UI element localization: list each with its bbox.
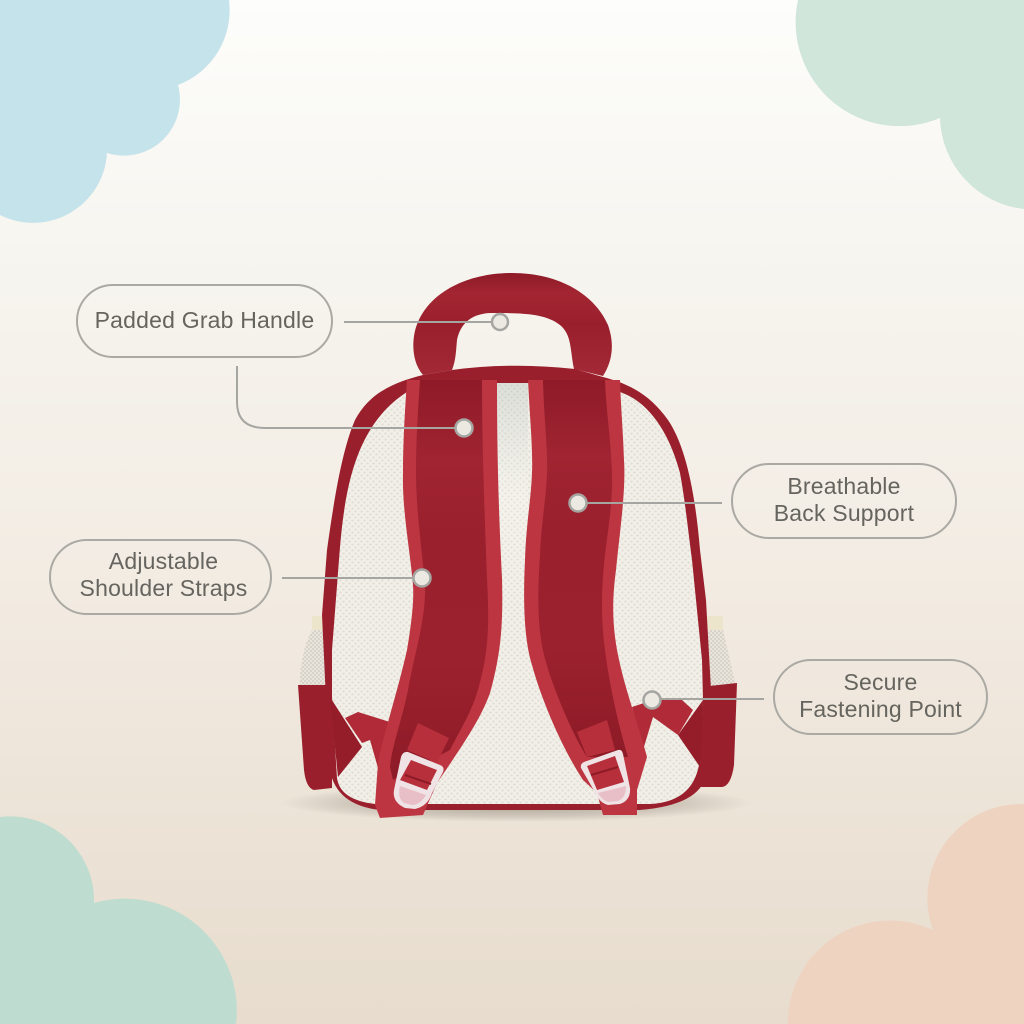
label: adjustable shoulder straps: [49, 539, 272, 615]
grab handle: [413, 273, 612, 376]
left webbing strap: [330, 697, 390, 777]
left buckle: [394, 723, 449, 809]
decoration: green cloud top right: [796, 0, 1024, 209]
label: secure fastening point: [773, 659, 988, 735]
label: breathable back support: Back Support: [774, 500, 914, 526]
ground shadow: [281, 784, 751, 822]
mesh back panel: [332, 383, 703, 804]
side pockets: [298, 616, 737, 790]
label: adjustable shoulder straps: Shoulder Straps: [80, 575, 247, 601]
backpack illustration: [281, 273, 751, 822]
back panel body: [322, 366, 711, 810]
right shoulder strap: [524, 380, 647, 815]
label: breathable back support: [731, 463, 957, 539]
mesh centre channel shading: [497, 383, 528, 763]
right webbing strap: [632, 700, 703, 767]
label: secure fastening point: Fastening Point: [799, 696, 962, 722]
label: padded grab handle: Padded Grab Handle: [95, 306, 314, 332]
decoration: blue cloud top left: [0, 0, 230, 223]
label: breathable back support: Breathable: [787, 472, 901, 498]
label: padded grab handle: [76, 284, 333, 358]
right buckle: [577, 720, 630, 805]
decoration: peach cloud bottom right: [788, 804, 1024, 1024]
marker dots: [414, 314, 660, 708]
label: adjustable shoulder straps: Adjustable: [109, 548, 218, 574]
left shoulder strap: [375, 380, 502, 818]
decoration: green cloud bottom left: [0, 816, 237, 1024]
leader lines: [237, 322, 764, 699]
label: secure fastening point: Secure: [843, 668, 918, 694]
